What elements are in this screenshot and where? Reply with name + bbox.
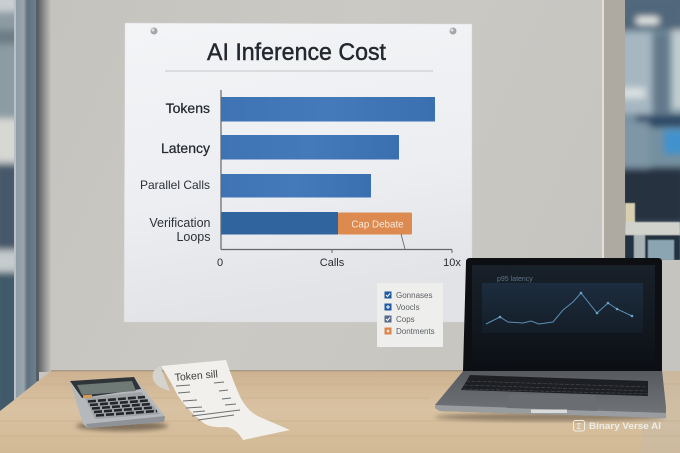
left window with blurred office	[0, 0, 14, 411]
callout: Cap Debate	[338, 212, 412, 249]
poster sheet	[124, 23, 472, 322]
receipt: Token sill: Token sill	[174, 368, 218, 384]
laptop screen	[463, 258, 662, 371]
p95 latency line chart	[482, 276, 643, 333]
sticky note legend	[377, 283, 443, 347]
bar: Parallel Calls: Parallel Calls	[140, 178, 210, 192]
bar: Latency	[161, 135, 399, 160]
watermark: Binary Verse AI: Binary Verse AI	[589, 421, 661, 432]
poster: AI Inference Cost	[124, 23, 472, 322]
p95 latency line chart: p95 latency	[497, 276, 533, 283]
bar: Tokens	[166, 97, 435, 122]
axes: 0	[217, 257, 223, 269]
pins	[150, 28, 456, 34]
legend item: Gonnases: Gonnases	[396, 291, 432, 300]
bar: Tokens: Tokens	[166, 100, 210, 116]
desk	[0, 370, 680, 453]
left window frame	[14, 0, 51, 400]
axes: 10x	[443, 257, 461, 269]
bar: Verification Loops: Loops	[176, 230, 210, 244]
right column	[602, 0, 625, 262]
bar: Verification Loops: Verification	[149, 216, 211, 230]
bar: Latency: Latency	[161, 140, 210, 156]
calculator	[70, 377, 168, 431]
right window with blurred office	[620, 0, 680, 260]
laptop	[435, 258, 666, 421]
bar: Parallel Calls	[140, 174, 371, 198]
callout: Cap Debate: Cap Debate	[351, 220, 404, 230]
watermark: Binary Verse AI: Σ	[577, 422, 582, 431]
axes	[217, 90, 461, 269]
axes: Calls	[320, 257, 345, 269]
laptop base	[435, 370, 666, 421]
title: AI Inference Cost	[207, 39, 386, 66]
legend item: Voocls: Voocls	[396, 303, 420, 312]
bar: Verification Loops	[149, 212, 338, 244]
legend item: Cops: Cops	[396, 315, 415, 324]
receipt: Token sill	[153, 360, 290, 440]
legend item: Dontments: Dontments	[396, 327, 435, 336]
